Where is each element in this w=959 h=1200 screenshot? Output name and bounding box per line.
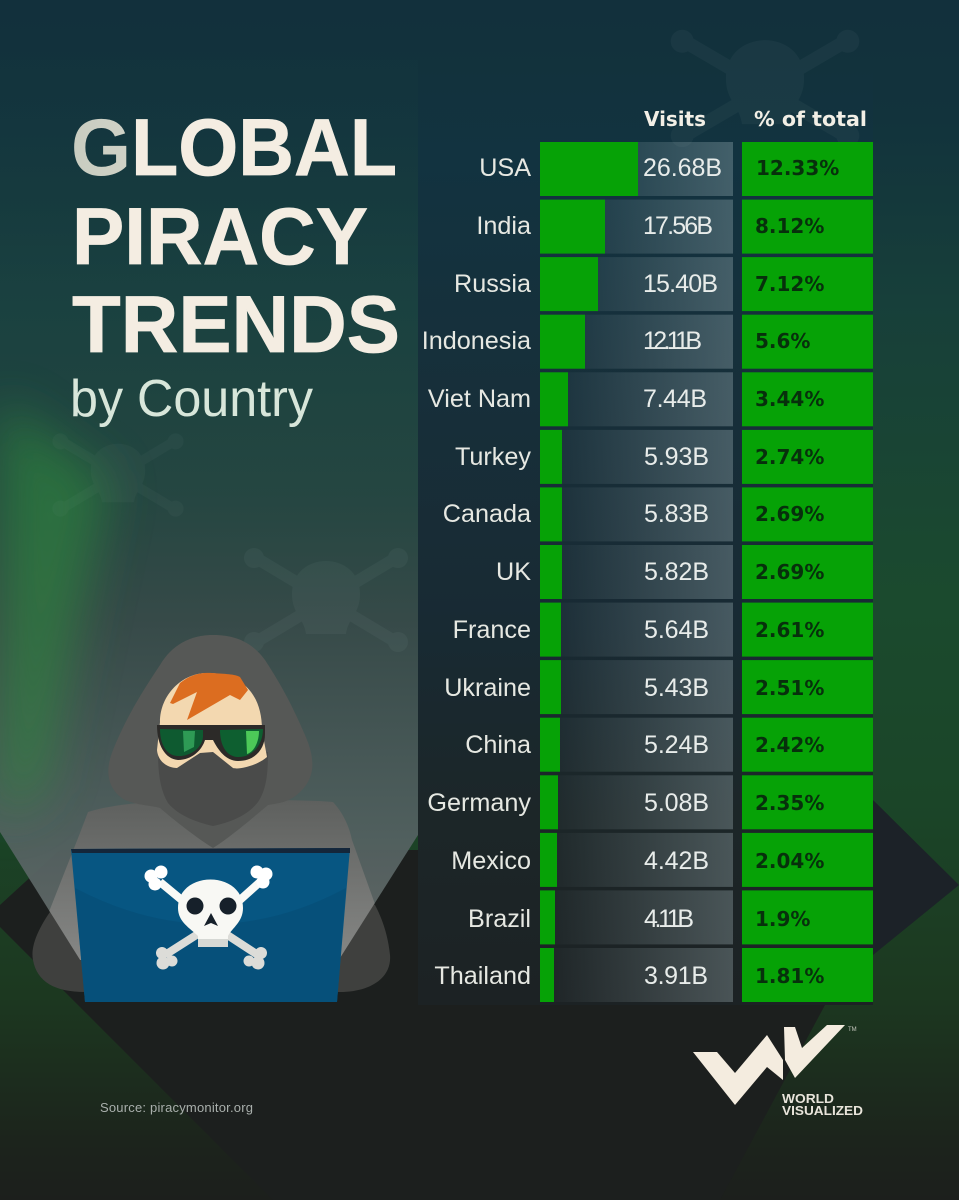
column headers: Visits bbox=[644, 107, 706, 131]
row: Thailand bbox=[434, 948, 873, 1002]
row: Indonesia bbox=[422, 315, 873, 369]
row: Russia bbox=[454, 257, 873, 311]
row: Ukraine bbox=[444, 660, 873, 714]
row: Russia: Russia bbox=[454, 270, 532, 298]
laptop bbox=[71, 848, 350, 1002]
row: Brazil bbox=[468, 890, 873, 944]
face bbox=[157, 673, 267, 768]
row: Brazil: 4.11B bbox=[644, 905, 694, 933]
column headers bbox=[644, 107, 867, 131]
row: India: 8.12% bbox=[755, 214, 824, 238]
row: France: 5.64B bbox=[644, 616, 709, 644]
row: India bbox=[476, 200, 873, 254]
hoodie body bbox=[50, 800, 375, 960]
row: China: China bbox=[465, 731, 532, 759]
row: Mexico bbox=[451, 833, 873, 887]
row: UK: 2.69% bbox=[755, 560, 824, 584]
title: PIRACY bbox=[72, 192, 368, 282]
title bbox=[70, 103, 400, 428]
watermark skull: left bbox=[52, 433, 184, 517]
row: France: France bbox=[453, 616, 531, 644]
row: Turkey bbox=[455, 430, 873, 484]
row: Canada: 2.69% bbox=[755, 502, 824, 526]
logo: World Visualized: WORLD bbox=[782, 1091, 834, 1106]
row: Canada: Canada bbox=[443, 500, 532, 528]
row: USA: USA bbox=[479, 154, 531, 182]
hood bbox=[108, 635, 312, 848]
row: Viet Nam: 7.44B bbox=[643, 385, 707, 413]
row: Indonesia: 5.6% bbox=[755, 329, 810, 353]
row: Indonesia: 12.11B bbox=[643, 327, 702, 355]
row: France: 2.61% bbox=[755, 618, 824, 642]
row: Thailand: Thailand bbox=[434, 962, 531, 990]
logo: World Visualized bbox=[693, 1025, 863, 1118]
row: Ukraine: 5.43B bbox=[644, 674, 709, 702]
mask bbox=[158, 752, 268, 826]
hacker illustration bbox=[30, 635, 395, 1002]
row: USA: 26.68B bbox=[643, 154, 722, 182]
spotlight panel bbox=[0, 60, 418, 963]
row: Russia: 15.40B bbox=[643, 270, 718, 298]
row: China bbox=[465, 718, 873, 772]
row: Canada bbox=[443, 487, 873, 541]
row: UK: 5.82B bbox=[644, 558, 709, 586]
row: USA bbox=[479, 142, 873, 196]
row: Ukraine: 2.51% bbox=[755, 676, 824, 700]
row: Canada: 5.83B bbox=[644, 500, 709, 528]
hair bbox=[170, 673, 248, 720]
sunglasses bbox=[157, 725, 265, 761]
row: Ukraine: Ukraine bbox=[444, 674, 531, 702]
row: Mexico: Mexico bbox=[451, 847, 531, 875]
row: India: India bbox=[476, 212, 532, 240]
row: Germany: 2.35% bbox=[755, 791, 824, 815]
row: Viet Nam: 3.44% bbox=[755, 387, 824, 411]
laptop skull and crossbones bbox=[144, 866, 272, 970]
row: France bbox=[453, 603, 873, 657]
green glow bbox=[0, 400, 110, 820]
row: Turkey: 5.93B bbox=[644, 443, 709, 471]
row: Thailand: 3.91B bbox=[644, 962, 708, 990]
row: Indonesia: Indonesia bbox=[422, 327, 532, 355]
row: Germany: Germany bbox=[427, 789, 531, 817]
logo: World Visualized: VISUALIZED bbox=[782, 1103, 863, 1118]
title: GLOBAL bbox=[71, 103, 397, 193]
row: Brazil: Brazil bbox=[468, 905, 531, 933]
watermark skull: top right bbox=[671, 30, 859, 147]
row: UK bbox=[496, 545, 873, 599]
row: Thailand: 1.81% bbox=[755, 964, 824, 988]
row: UK: UK bbox=[496, 558, 531, 586]
row: China: 2.42% bbox=[755, 733, 824, 757]
row: Mexico: 4.42B bbox=[644, 847, 709, 875]
row: India: 17.56B bbox=[643, 212, 713, 240]
row: Turkey: 2.74% bbox=[755, 445, 824, 469]
row: Viet Nam bbox=[428, 372, 873, 426]
logo: World Visualized: TM bbox=[848, 1027, 857, 1033]
table bbox=[422, 142, 873, 1002]
row: Germany bbox=[427, 775, 873, 829]
row: Viet Nam: Viet Nam bbox=[428, 385, 531, 413]
watermark skull: centre bbox=[244, 548, 408, 652]
row: Turkey: Turkey bbox=[455, 443, 531, 471]
row: Mexico: 2.04% bbox=[755, 849, 824, 873]
row: USA: 12.33% bbox=[756, 156, 839, 180]
watermark skulls bbox=[52, 30, 859, 652]
source note: Source: piracymonitor.org bbox=[100, 1100, 253, 1115]
row: Russia: 7.12% bbox=[755, 272, 824, 296]
table column backdrop bbox=[418, 60, 873, 1005]
title: TRENDS bbox=[72, 280, 400, 370]
row: Germany: 5.08B bbox=[644, 789, 709, 817]
title: by Country bbox=[70, 370, 313, 428]
column headers: % of total bbox=[754, 107, 867, 131]
row: Brazil: 1.9% bbox=[755, 907, 810, 931]
hacker arms bbox=[32, 850, 390, 992]
row: China: 5.24B bbox=[644, 731, 709, 759]
